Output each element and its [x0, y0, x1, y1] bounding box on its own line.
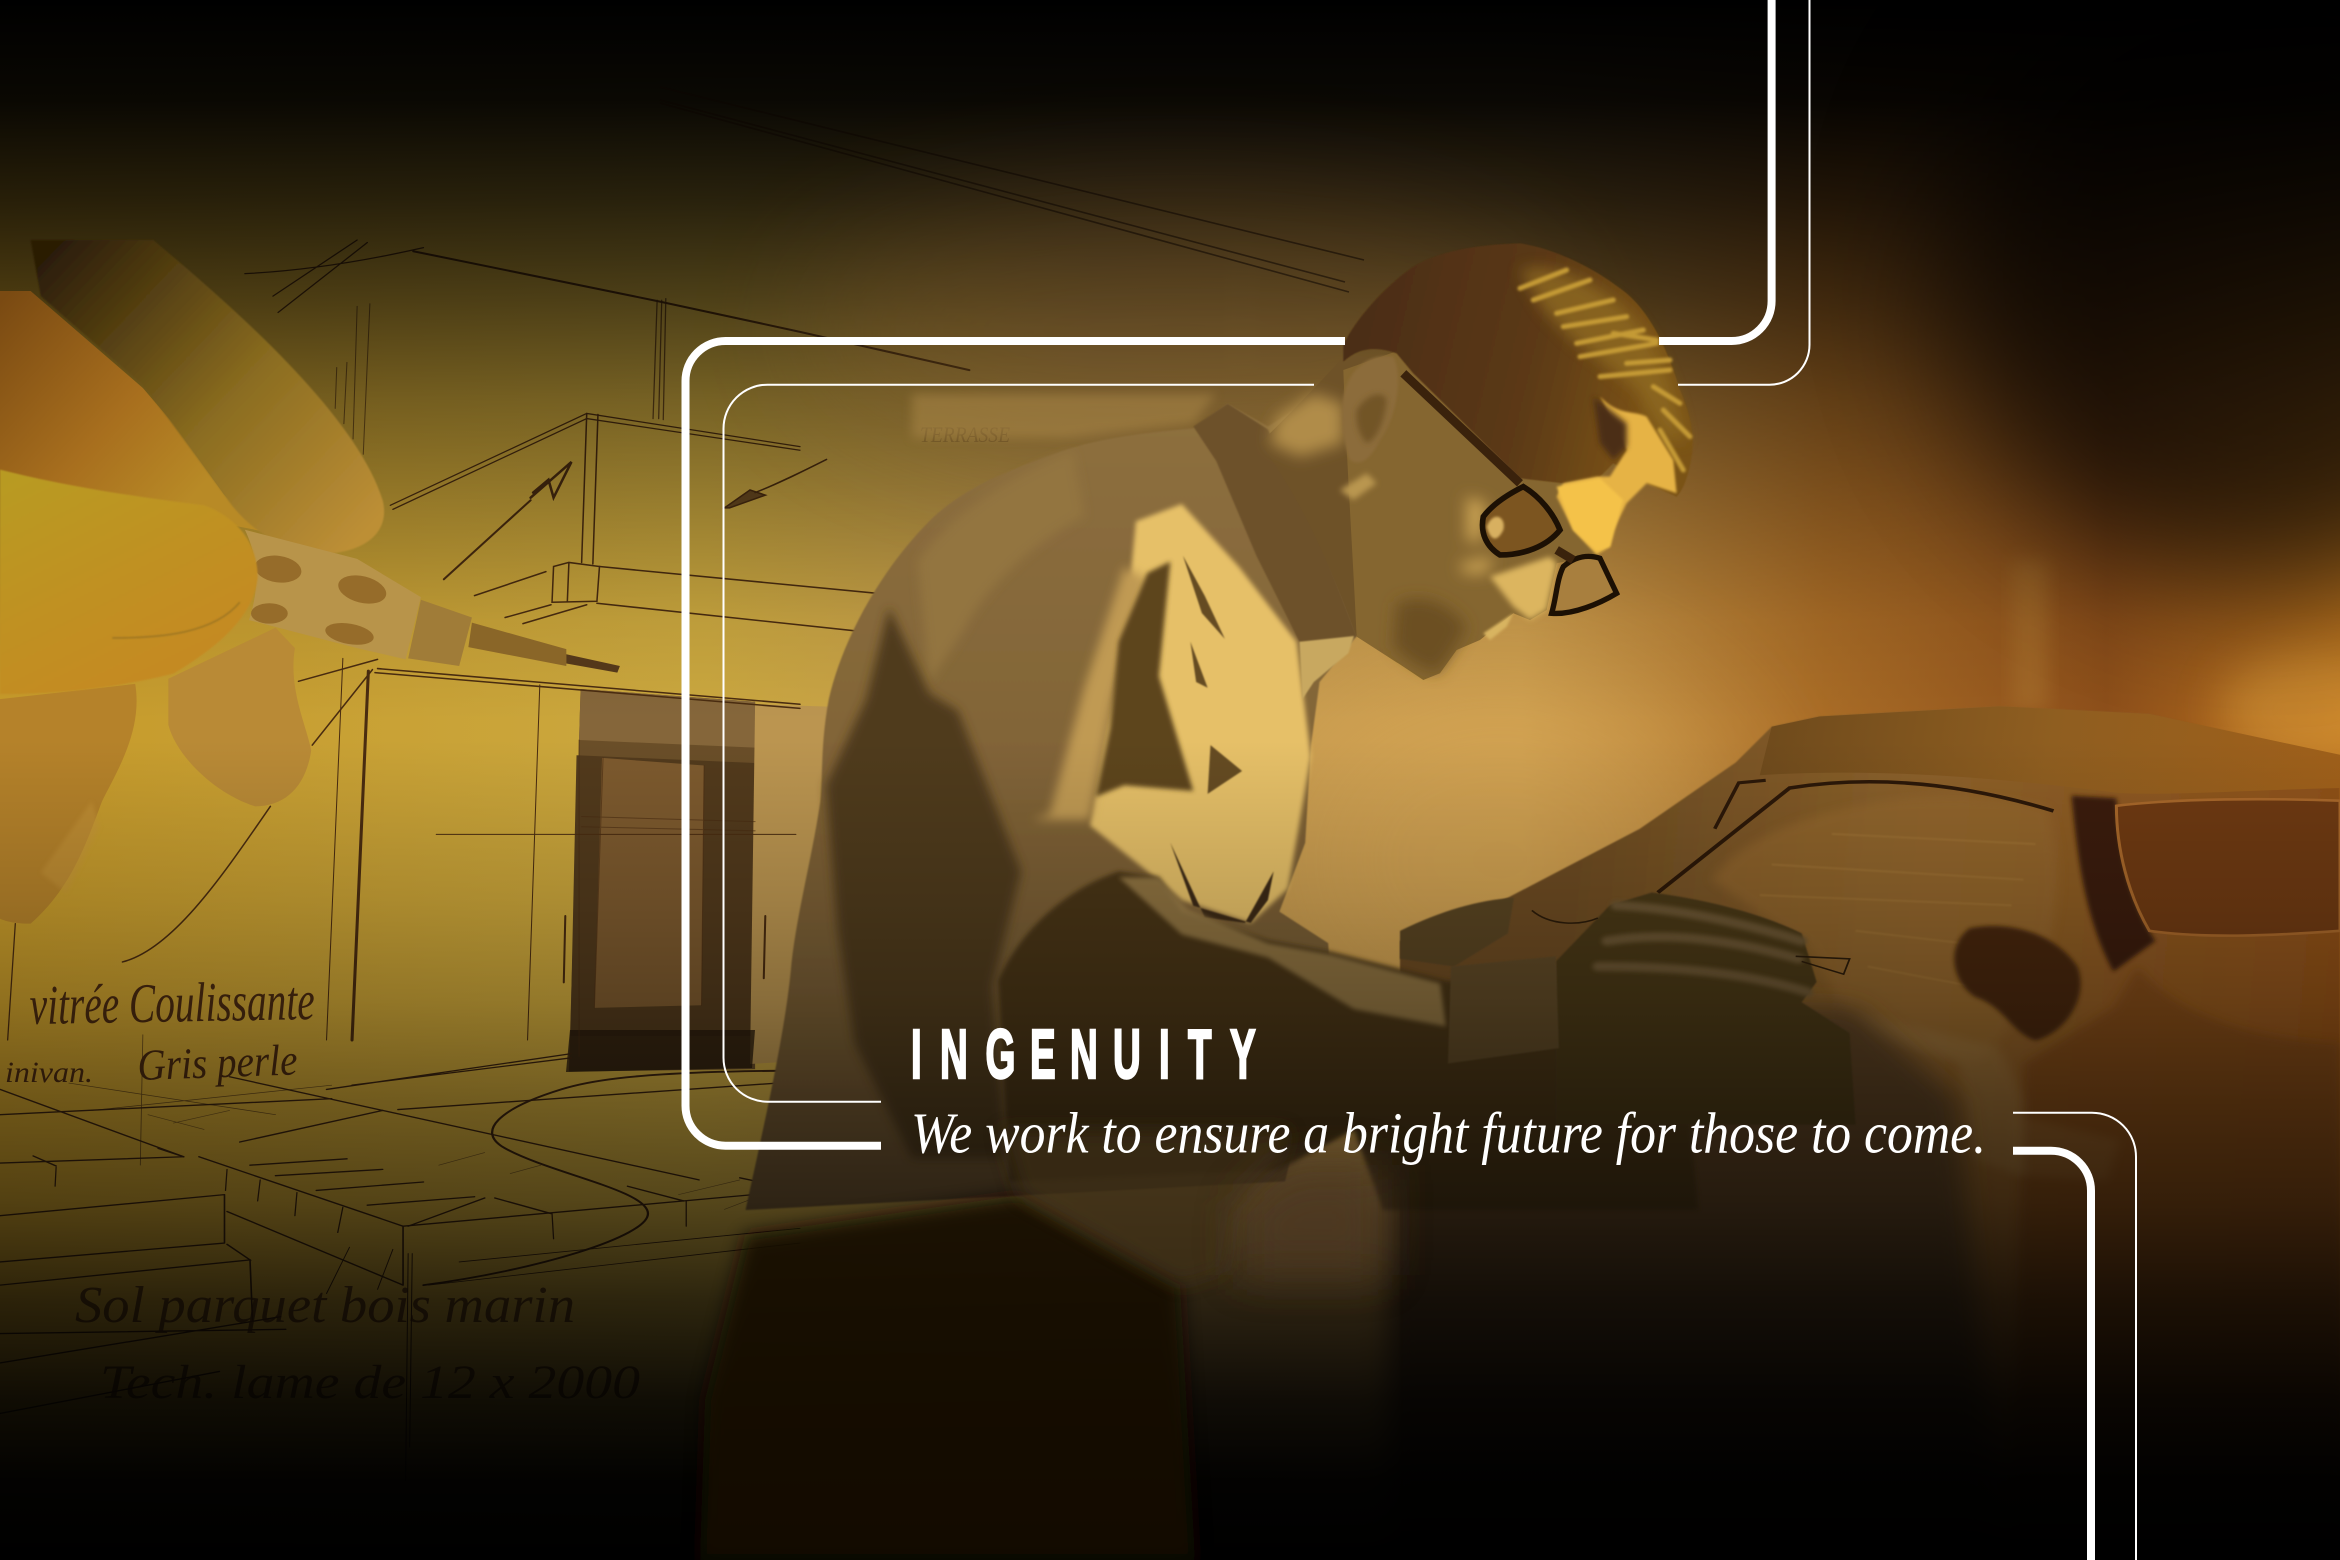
- chalky lower edge: [1856, 1012, 2023, 1176]
- handwritten annotations: Tech. lame de 12 x 2000: [100, 1356, 640, 1409]
- left hand: [1400, 898, 1514, 967]
- handwritten annotations: vitrée Coulissante: [29, 970, 315, 1037]
- fingers: [1598, 905, 1808, 992]
- background: workshop glow and wall bands: [1226, 240, 2340, 1060]
- light background patch: [1240, 1165, 1385, 1275]
- cuff: [1448, 956, 1559, 1063]
- pen collar and tip: [408, 600, 472, 666]
- lit chest: [1090, 504, 1311, 923]
- top vignette: [0, 0, 2340, 720]
- lower body shading: [700, 1130, 1385, 1560]
- back shadow: [826, 607, 1021, 1158]
- handwritten annotations: Sol parquet bois marin: [75, 1277, 575, 1334]
- wall band behind shoulder: [912, 394, 1216, 438]
- forehead light: [1557, 397, 1677, 555]
- handwritten annotations: [5, 422, 1010, 1409]
- windscreen pillar: [2071, 796, 2155, 972]
- dark doorway: [569, 689, 837, 1072]
- frame: thin white rounded lines: [724, 0, 2136, 1560]
- lower body: [2011, 967, 2340, 1558]
- heading: INGENUITY: INGENUITY: [911, 1015, 1256, 1093]
- car silhouette: [1400, 706, 2340, 1558]
- neck: [1260, 353, 1400, 637]
- photo: clay car model: [1388, 706, 2340, 1558]
- photo: hands shaping the model: [1400, 893, 1856, 1125]
- upper finger: [31, 240, 384, 554]
- chest shadows: [1096, 561, 1193, 797]
- glasses: [1403, 373, 1617, 613]
- handwritten annotations: Gris perle: [137, 1035, 298, 1090]
- architectural sketch of a building interior: [0, 240, 1010, 1481]
- tagline: We work to ensure a bright future for those to come.: [911, 1101, 1986, 1166]
- hair shadow: [1593, 397, 1627, 460]
- sleeve shoulder light: [918, 452, 1084, 682]
- tool wire: [1532, 910, 1850, 974]
- face shadow: [1393, 599, 1467, 673]
- photo: man in glasses leaning over the model: [746, 243, 1698, 1210]
- face: [1343, 350, 1610, 680]
- dark underbody: [1388, 997, 2000, 1558]
- floor sketch lines: [0, 1035, 969, 1481]
- frame: thick white rounded lines: [686, 0, 2091, 1560]
- photo: hand holding a technical pen: [0, 240, 620, 924]
- pen barrel: [245, 530, 421, 659]
- top-right shadow: [1940, 0, 2340, 590]
- side highlights: [1712, 797, 2057, 1063]
- handwritten annotations: inivan.: [5, 1056, 93, 1089]
- ear: [1342, 356, 1398, 462]
- window: [2116, 799, 2340, 936]
- roof: [1760, 706, 2340, 794]
- hair: [1343, 243, 1693, 497]
- lower fingers: [168, 628, 311, 806]
- knuckle: [0, 291, 260, 531]
- trousers: [700, 1195, 1195, 1560]
- upper sketch lines: [8, 240, 969, 1056]
- collar: [1193, 404, 1357, 656]
- sleeve highlights: [1119, 877, 1446, 1026]
- right hand: [1556, 893, 1856, 1125]
- thumb: [0, 470, 258, 694]
- head: [1260, 243, 1693, 680]
- door seam: [1658, 782, 2053, 893]
- body: [746, 378, 1698, 1210]
- shirt tail: [1000, 1130, 1290, 1285]
- ceiling perspective lines: [660, 87, 1364, 292]
- handwritten annotations: TERRASSE: [920, 422, 1010, 447]
- hair highlights: [1520, 270, 1690, 470]
- face light: [1460, 497, 1493, 573]
- wheel arch: [1954, 926, 2081, 1041]
- centre upper glow: [800, 200, 1560, 460]
- hair mid light: [1520, 268, 1685, 443]
- body scratches: [1760, 834, 2035, 987]
- arm: [998, 871, 1698, 1210]
- bottom vignette: [0, 740, 2340, 1560]
- chequered floor: [566, 1030, 755, 1072]
- torso: [746, 378, 1357, 1210]
